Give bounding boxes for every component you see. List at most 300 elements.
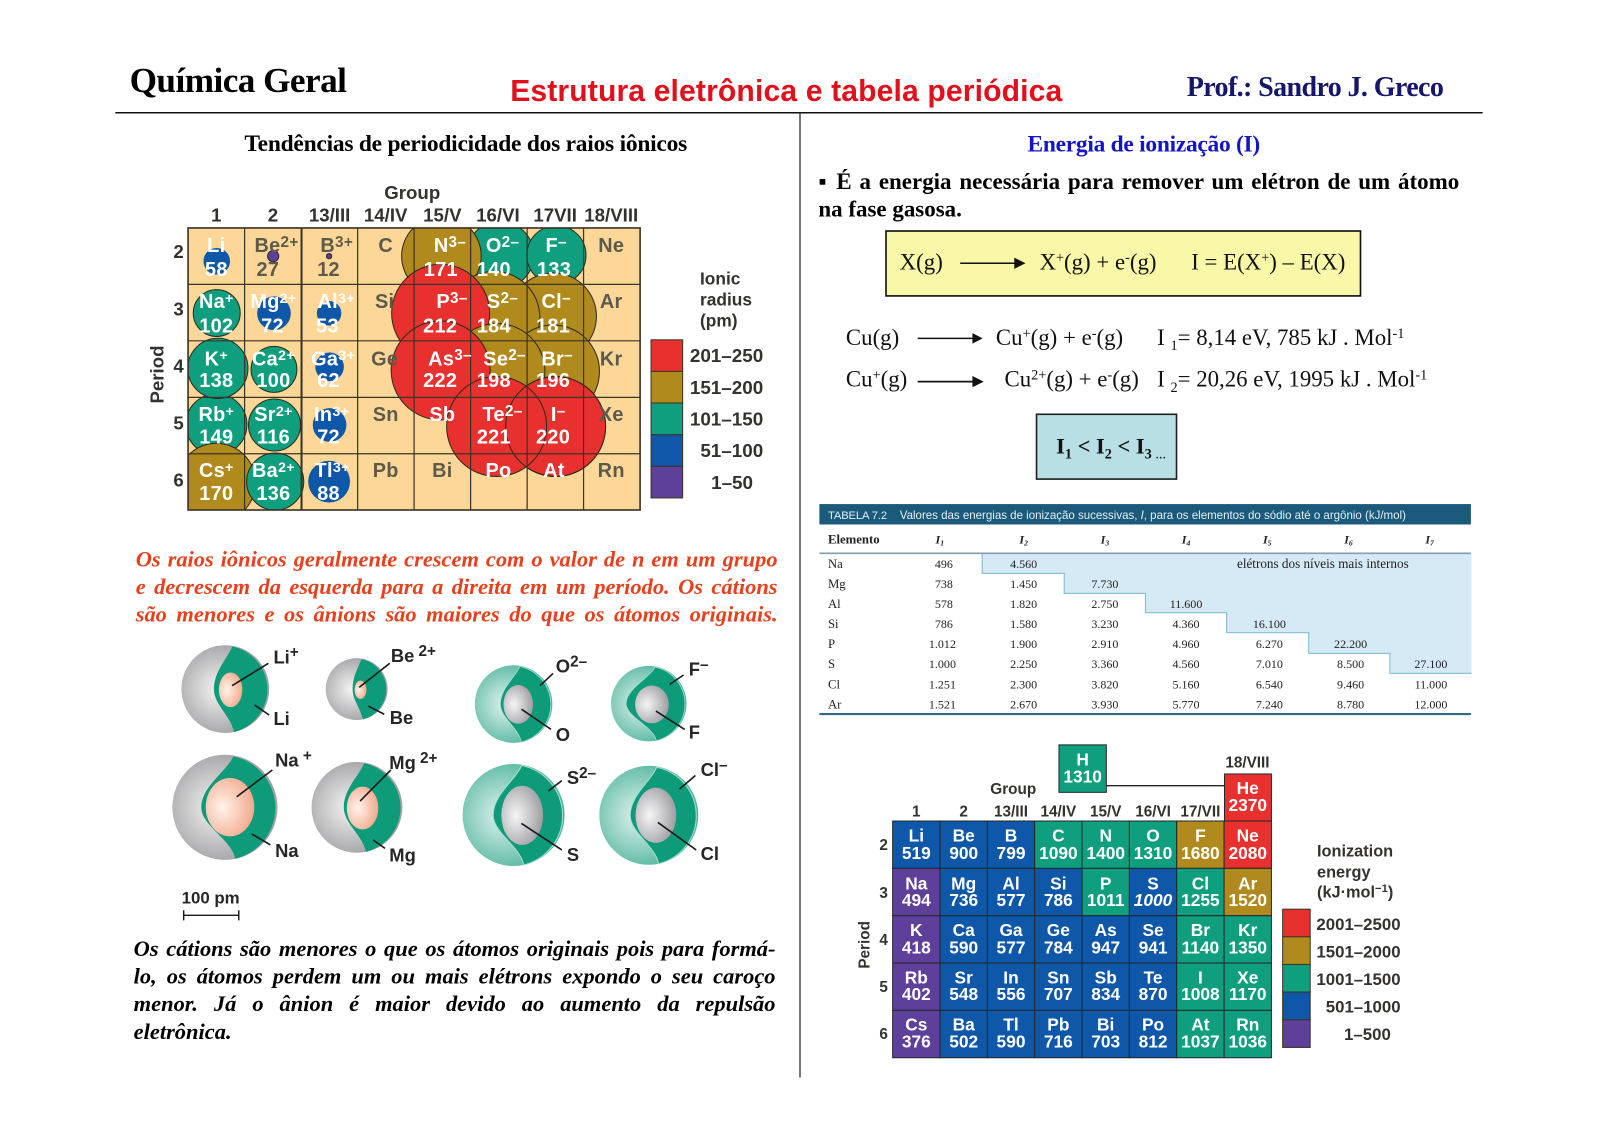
element symbols and radii: Mg [250,291,280,313]
element symbols and energies: 590 [949,937,978,957]
element symbols and energies: 1255 [1181,890,1220,910]
group and period labels: 4 [173,355,184,376]
element symbols and radii: 2+ [281,234,299,251]
table header row: I [1344,532,1349,546]
element symbols and radii: K [205,348,219,370]
element symbols and radii: 3– [450,290,468,307]
group and period labels: 3 [879,885,888,902]
element symbols and radii: 27 [256,259,279,281]
element symbols and energies: 577 [997,890,1025,910]
element symbols and energies: Xe [1237,967,1259,987]
element symbols and radii: 196 [536,370,570,392]
element symbols and radii: Na [199,291,225,313]
group and period labels: 16/VI [476,204,520,225]
element symbols and radii: Po [485,460,511,482]
element symbols and radii: I [551,404,557,426]
equation: first ionization of Cu: (g) [1096,325,1123,350]
text block: cations and anions explanation [134,936,776,1044]
ionic radius bubbles [188,228,606,510]
element symbols and radii: 170 [199,483,233,505]
box: I1 < I2 < I3: 2 [1105,446,1112,462]
element symbols and radii: 220 [536,426,570,448]
element symbols and energies: Te [1144,967,1163,987]
box: X(g) ionization equation: X(g) [900,249,943,274]
element symbols and radii: Cl [541,291,562,313]
element symbols and energies: 1036 [1228,1031,1267,1051]
table header row: 6 [1349,538,1353,547]
element symbols and energies: 1037 [1181,1031,1220,1051]
element symbols and radii: 222 [423,370,457,392]
shaded inner-shell region [982,553,1472,673]
text block: ionic radius trends (red): Os raios iônicos geralmente crescem com o valor de n em um grupo [136,546,778,571]
group and period labels: 15/V [1090,804,1122,821]
element symbols and radii: Rb [198,404,226,426]
group and period labels: 17/VII [1180,804,1220,821]
table header row: I [1263,532,1268,546]
element symbols and energies: Sr [955,967,973,987]
group and period labels: Group [384,182,440,203]
text block: ionic radius trends (red) [136,546,778,627]
equation: first ionization of Cu: -1 [1393,326,1404,342]
header: Estrutura eletrônica e tabela periódica: Estrutura eletrônica e tabela periódica [510,75,1062,108]
table body rows: 8.780 [1337,697,1364,711]
element symbols and energies: 2370 [1228,795,1267,815]
group and period labels [146,182,638,491]
table header row: I [1019,532,1024,546]
sphere: S [463,764,597,866]
text block: definition of ionization energy: ▪ É a energia necessária para remover um elétron de um átomo [818,168,1459,194]
element symbols and radii: 149 [199,426,233,448]
group and period labels: Period [856,921,873,969]
group and period labels: 2 [268,204,278,225]
table body rows: 1.900 [1010,637,1037,651]
sphere: Na: + [299,748,312,765]
table title bar [819,504,1471,524]
element symbols and radii: P [436,291,450,313]
element symbols and radii: + [226,404,234,420]
table body rows: Ar [828,697,842,711]
element symbols and radii: – [557,403,566,420]
element symbols and energies: 941 [1139,937,1168,957]
element symbols and energies: 1680 [1181,843,1220,863]
element symbols and energies: 736 [949,890,978,910]
box: I1 < I2 < I3 [1037,414,1177,479]
text block: definition of ionization energy [818,168,1459,222]
element symbols and radii: 3+ [335,234,353,251]
element symbols and radii: Bi [432,460,453,482]
element symbols and energies: 556 [997,984,1026,1004]
box: I1 < I2 < I3: I [1056,433,1065,458]
group and period labels: 4 [879,932,888,949]
element symbols and radii: Xe [599,404,624,426]
table body rows: 3.360 [1091,657,1118,671]
element symbols and radii: 2– [502,234,519,251]
table header row: I [1101,532,1105,546]
element symbols and radii: Si [375,291,394,313]
group and period labels: 3 [173,298,184,319]
sphere: O: 2– [570,653,588,670]
element symbols and energies: Al [1002,873,1020,893]
table body rows: 1.820 [1010,597,1037,611]
element symbols and energies: Na [905,873,928,893]
element symbols and radii: 2+ [278,348,295,364]
table header row: 3 [1104,538,1109,547]
box: I1 < I2 < I3: < I [1072,433,1105,458]
sphere: Li: Li [273,708,290,729]
element symbols and energies: 1008 [1181,984,1220,1004]
group and period labels: 14/IV [364,204,408,225]
coloured cells [893,745,1271,1058]
box: X(g) ionization equation: + [1056,250,1064,266]
table body rows: 3.930 [1091,697,1118,711]
box: X(g) ionization equation: (g) + e [1064,249,1125,274]
legend: ionization energy: Ionization [1317,843,1393,861]
equation: second ionization of Cu: 2+ [1031,368,1046,384]
element symbols and radii: Tl [315,460,333,482]
element symbols and radii: C [378,235,393,257]
group and period labels: 2 [879,837,888,854]
element symbols and radii: Sr [254,404,276,426]
sphere: Cl: Cl [701,843,719,864]
group and period labels: 13/III [994,804,1028,821]
element symbols and radii: 3+ [338,291,355,307]
element symbols and energies: 716 [1044,1031,1073,1051]
equation: first ionization of Cu [846,325,1404,354]
element symbols and energies: 900 [949,843,978,863]
box: X(g) ionization equation: X [1039,249,1056,274]
table body rows: 9.460 [1337,677,1364,691]
element symbols and radii: 12 [317,259,340,281]
element symbols and energies: 502 [949,1031,978,1051]
element symbols and energies: Br [1191,920,1210,940]
element symbols and radii: 2– [505,403,523,420]
element symbols and energies: K [910,920,923,940]
element symbols and energies: Mg [951,873,976,893]
element symbols and radii: Ba [252,460,278,482]
element symbols and radii: 3+ [333,460,350,476]
element symbols and radii: 3+ [332,404,349,420]
element symbols and energies: In [1003,967,1019,987]
element symbols and energies: Li [909,826,924,846]
element symbols and radii: Li [207,235,225,257]
element symbols and energies: 834 [1091,984,1121,1004]
sphere: Mg: 2+ [416,750,438,767]
table body rows: 12.000 [1414,697,1447,711]
element symbols and energies: F [1195,826,1206,846]
element symbols and energies: 1520 [1228,890,1267,910]
element symbols and energies: 1350 [1228,937,1267,957]
sphere: Na [172,748,312,861]
element symbols and radii: 184 [477,316,511,338]
element symbols and radii: 72 [261,316,284,338]
equation: first ionization of Cu: + [1023,326,1031,342]
element symbols and energies: 707 [1044,984,1073,1004]
element symbols and radii: At [543,460,565,482]
sphere: Cl: – [719,757,728,774]
table 7.2: successive ionization energies [819,504,1472,714]
element symbols and energies: 1090 [1039,843,1078,863]
box: I1 < I2 < I3: ... [1152,446,1166,462]
sphere: Be: 2+ [414,643,436,660]
legend: ionization energy: −1 [1375,883,1388,895]
group and period labels: 16/VI [1135,804,1171,821]
table body rows: 7.010 [1256,657,1283,671]
legend: ionic radius: 101–150 [690,409,763,430]
connector from H to He [1106,785,1224,787]
table header row [828,532,1435,547]
equation: second ionization of Cu: = 20,26 eV, 1995 kJ . Mol [1178,367,1415,392]
element symbols and energies: Po [1142,1015,1164,1035]
element symbols and radii: Sb [429,404,455,426]
element symbols and radii: 53 [316,316,339,338]
table body rows: Mg [828,577,846,591]
element symbols and energies: Rn [1236,1015,1259,1035]
heading: Tendências de periodicidade dos raios iônicos: Tendências de periodicidade dos raios iônicos [244,131,687,157]
element symbols and energies: Tl [1003,1015,1019,1035]
element symbols and energies: Sn [1047,967,1069,987]
element symbols and radii: 72 [317,426,340,448]
table body rows: 4.360 [1172,617,1200,631]
element symbols and energies: 402 [902,984,931,1004]
table body rows: 2.250 [1010,657,1037,671]
element symbols and energies: 799 [997,843,1025,863]
table body rows: 6.270 [1256,637,1283,651]
element symbols and radii: + [225,291,234,307]
sphere: Li: Li [273,646,290,667]
sphere: S: S [567,767,579,788]
element symbols and energies: 947 [1091,937,1120,957]
element symbols and radii: Be [254,235,281,257]
sphere: Mg [312,750,438,866]
element symbols and radii: 212 [423,316,457,338]
group and period labels: 17VII [533,204,577,225]
element symbols and energies: C [1052,826,1065,846]
table body rows: 1.251 [929,677,956,691]
element symbols and radii: Rn [598,460,625,482]
table body rows: 11.000 [1415,677,1447,691]
box: X(g) ionization equation [886,231,1361,296]
header rule [115,112,1483,114]
sphere: F [611,656,709,742]
element symbols and radii: + [219,348,228,364]
element symbols and radii: 58 [205,259,228,281]
element symbols and energies: Ge [1047,920,1070,940]
table header row: Elemento [828,532,880,546]
legend: ionic radius [651,269,763,498]
element symbols and energies: 494 [902,890,931,910]
element symbols and energies: 1140 [1182,937,1219,957]
element symbols and radii: 100 [256,370,291,392]
group and period labels: Group [990,781,1036,798]
element symbols and energies: H [1076,750,1089,770]
element symbols and energies: Cl [1192,873,1209,893]
diagram: ion versus atom spheres [172,643,728,920]
table title bar: Valores das energias de ionização sucessivas, I, para os elementos do sódio até o argônio (kJ/mol) [900,510,1406,522]
sphere: Be [326,643,436,728]
element symbols and energies: Ca [953,920,975,940]
text block: cations and anions explanation: lo, os átomos perdem um ou mais elétrons expondo o seu caroço [134,963,776,989]
table header row: 5 [1268,538,1272,547]
element symbols and radii: 2+ [278,460,295,476]
table header row: 7 [1430,538,1435,547]
legend: ionization energy: ) [1388,883,1393,901]
table body rows: 3.230 [1091,617,1118,631]
element symbols and energies: Ar [1238,873,1258,893]
equation: second ionization of Cu: 2 [1170,380,1178,396]
element symbols and energies: 590 [997,1031,1025,1051]
element symbols and energies: Si [1050,873,1067,893]
element symbols and energies: 1310 [1134,843,1172,863]
sphere: Mg: Mg [389,845,416,866]
heading: Energia de ionização (I): Energia de ionização (I) [1028,132,1260,158]
element symbols and energies: 519 [902,843,931,863]
element symbols and radii: As [428,348,454,370]
sphere: Be: Be [390,707,413,728]
element symbols and radii: 2– [501,290,518,307]
table body rows: 786 [935,617,953,631]
element symbols and radii: Ge [371,348,398,370]
table body rows [828,556,1447,711]
sphere: Na: Na [275,750,299,771]
element symbols and radii: In [314,404,332,426]
table header row: 1 [940,538,944,547]
group and period labels: 6 [879,1026,888,1043]
grid lines [188,228,640,510]
element symbols and energies: 703 [1091,1031,1121,1051]
box: I1 < I2 < I3: < I [1112,433,1145,458]
text block: definition of ionization energy: na fase gasosa. [818,196,962,221]
table body rows: 1.450 [1010,577,1037,591]
text block: ionic radius trends (red): e decrescem da esquerda para a direita em um período. Os cátions [136,573,778,599]
element symbols and radii: Ga [311,348,338,370]
table body rows: 22.200 [1334,637,1367,651]
legend: ionic radius: 51–100 [700,440,763,461]
equation: second ionization of Cu: (g) [1112,367,1139,392]
table body rows: 5.160 [1172,677,1200,691]
box: X(g) ionization equation: (g) [1130,249,1157,274]
element symbols and radii: 2– [508,347,526,364]
element symbols and radii: 181 [536,316,570,338]
element symbols and energies: Kr [1238,920,1258,940]
equation: first ionization of Cu: (g) + e [1031,325,1092,350]
element symbols and radii: Kr [600,348,623,370]
sphere: S: 2– [579,765,597,782]
element symbols and energies [902,750,1267,1051]
legend: ionic radius: radius [700,290,752,310]
sphere: S: S [567,844,579,865]
table body rows: 738 [935,577,953,591]
sphere: Be: Be [391,645,414,666]
element symbols and energies: As [1095,920,1117,940]
equation: first ionization of Cu: - [1092,326,1097,342]
group and period labels: 1 [211,204,222,225]
element symbols and radii: + [225,460,234,476]
header: Prof. Sandro J. Greco: Prof.: Sandro J. Greco [1187,72,1444,103]
legend: ionization energy [1283,843,1401,1047]
element symbols and radii: Al [318,291,338,313]
table body rows: 2.300 [1010,677,1037,691]
element symbols and energies: 577 [997,937,1025,957]
legend: ionic radius: 1–50 [711,472,753,493]
group and period labels: 15/V [423,204,462,225]
element symbols and radii: B [320,235,335,257]
element symbols and radii: 140 [477,259,511,281]
sphere: F: F [689,721,700,742]
table body rows: S [828,657,835,671]
element symbols and radii: 171 [424,259,458,281]
group and period labels: 2 [173,241,184,262]
element symbols and radii: Sn [373,404,399,426]
element symbols and energies: Be [953,826,975,846]
element symbols and radii: – [564,347,573,364]
table body rows: 1.580 [1010,617,1037,631]
element symbols and energies: 1400 [1086,843,1125,863]
equation: second ionization of Cu: Cu [1004,367,1031,392]
element symbols and radii: 198 [477,370,511,392]
element symbols and radii: S [487,291,501,313]
table header row: I [936,532,940,546]
table body rows: 578 [935,597,953,611]
group and period labels: 14/IV [1041,804,1077,821]
element symbols and radii: 221 [477,426,511,448]
group and period labels: 5 [173,413,184,434]
element symbols and radii: 3– [449,234,466,251]
legend: ionic radius: (pm) [700,311,738,331]
text block: ionic radius trends (red): são menores e os ânions são maiores do que os átomos originais. [136,601,778,627]
element symbols and energies: 870 [1139,984,1168,1004]
legend: ionization energy: 501–1000 [1326,998,1401,1017]
element symbols and energies: 1310 [1063,766,1102,786]
element symbols and energies: Rb [905,967,928,987]
equation: first ionization of Cu: Cu [996,325,1023,350]
equation: second ionization of Cu: (g) + e [1046,367,1107,392]
table body rows: 7.730 [1091,577,1118,591]
element symbols and radii: Cs [199,460,225,482]
table body rows: Al [828,597,841,611]
group and period labels: 6 [173,470,184,491]
table body rows: 7.240 [1256,697,1283,711]
element symbols and energies: Se [1142,920,1164,940]
table header row: I [1425,532,1430,546]
element symbols and energies: 376 [902,1031,931,1051]
table body rows: 3.820 [1091,677,1118,691]
element symbols and energies: Ga [999,920,1023,940]
element symbols and energies: N [1099,826,1112,846]
element symbols and radii: 102 [199,316,233,338]
scale bar: 100 pm [182,888,240,920]
element symbols and energies: Bi [1097,1015,1114,1035]
table header row: 2 [1023,538,1028,547]
equation: second ionization of Cu: - [1107,368,1112,384]
box: X(g) ionization equation: - [1125,250,1130,266]
equation: first ionization of Cu: Cu(g) [846,325,899,350]
element symbols and energies: Pb [1047,1015,1069,1035]
element symbols and energies: I [1198,967,1203,987]
sphere: O: O [556,724,570,745]
table body rows: 1.521 [929,697,956,711]
equation: second ionization of Cu: Cu [846,367,873,392]
element symbols and radii: O [486,235,502,257]
table body rows: 2.670 [1010,697,1037,711]
element symbols and radii: Ca [252,348,278,370]
legend: ionic radius: Ionic [700,269,741,289]
element symbols and energies: 784 [1044,937,1073,957]
element symbols and radii: Br [541,348,564,370]
table body rows: Si [828,617,839,631]
element symbols and energies: O [1146,826,1160,846]
table body rows: 4.560 [1172,657,1200,671]
sphere: Na: Na [275,840,299,861]
